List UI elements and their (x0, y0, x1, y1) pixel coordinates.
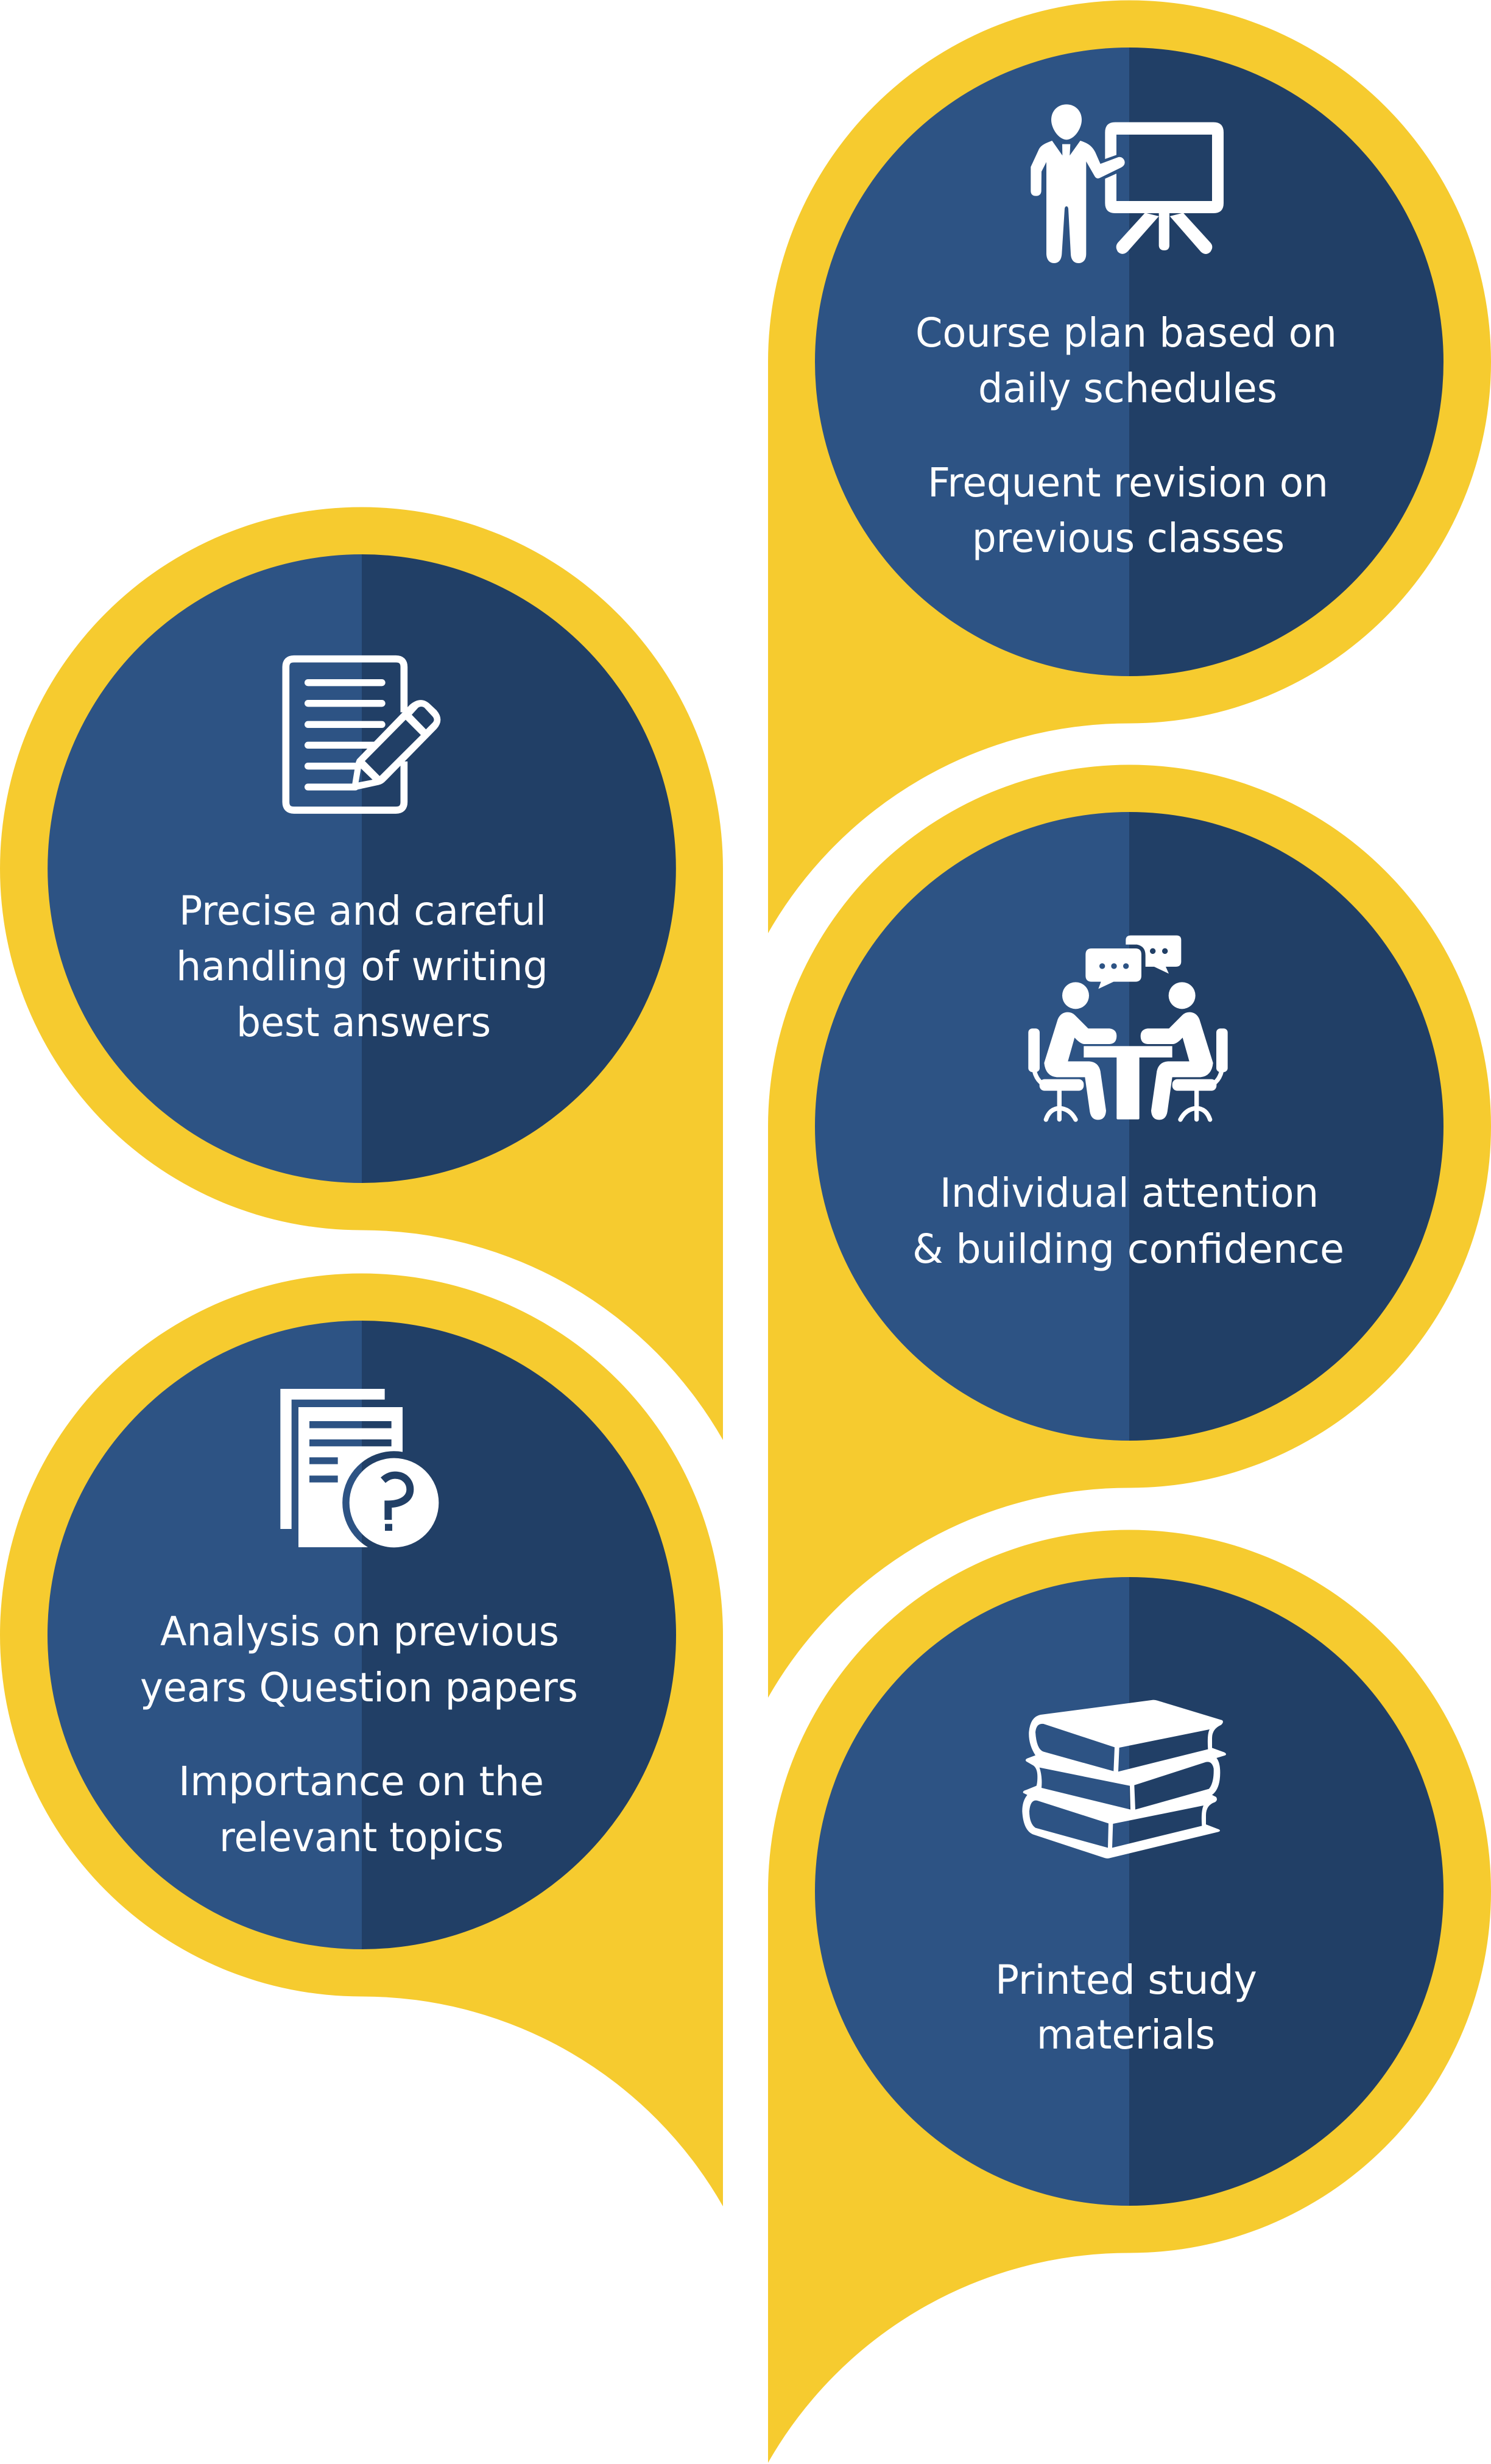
text: writing answers (176, 888, 548, 1046)
text: course plan: Frequent revision on (928, 459, 1328, 506)
icon: papers with question mark (280, 1389, 439, 1547)
text: course plan (915, 309, 1337, 562)
text: question paper analysis: years Question papers (140, 1664, 578, 1711)
text: writing answers: handling of writing (176, 943, 548, 990)
yellow drop shape (0, 507, 723, 1440)
text: printed study materials (995, 1957, 1257, 2058)
yellow drop shape (768, 1530, 1491, 2463)
icon: stack of books (1022, 1700, 1226, 1859)
text: question paper analysis: Importance on the (178, 1758, 544, 1805)
text: question paper analysis: Analysis on previous (160, 1608, 559, 1655)
text: writing answers: best answers (236, 999, 491, 1046)
text: individual attention (912, 1170, 1344, 1273)
icon: document and pencil (286, 659, 440, 810)
blue circle (48, 554, 676, 1183)
icon: teacher at presentation board (1031, 104, 1224, 263)
text: individual attention: & building confidence (912, 1226, 1344, 1273)
text: question paper analysis (140, 1608, 578, 1861)
blue circle (48, 1321, 676, 1949)
text: course plan: previous classes (972, 515, 1285, 562)
text: question paper analysis: relevant topics (219, 1814, 504, 1861)
panel: printed study materials (768, 1530, 1491, 2463)
text: course plan: Course plan based on (915, 309, 1337, 356)
yellow drop shape (768, 0, 1491, 933)
blue circle (815, 48, 1443, 676)
panel: course plan (768, 0, 1491, 933)
panel: question paper analysis (0, 1273, 723, 2206)
text: course plan: daily schedules (978, 365, 1277, 412)
panel: writing answers (0, 507, 723, 1440)
text: printed study materials: Printed study (995, 1957, 1257, 2003)
yellow drop shape (0, 1273, 723, 2206)
text: printed study materials: materials (1037, 2011, 1215, 2058)
icon: two people talking at a table (1028, 936, 1228, 1120)
yellow drop shape (768, 765, 1491, 1698)
panel: individual attention (768, 765, 1491, 1698)
text: individual attention: Individual attention (940, 1170, 1319, 1216)
blue circle (815, 1577, 1443, 2206)
blue circle (815, 812, 1443, 1441)
text: writing answers: Precise and careful (179, 888, 546, 934)
